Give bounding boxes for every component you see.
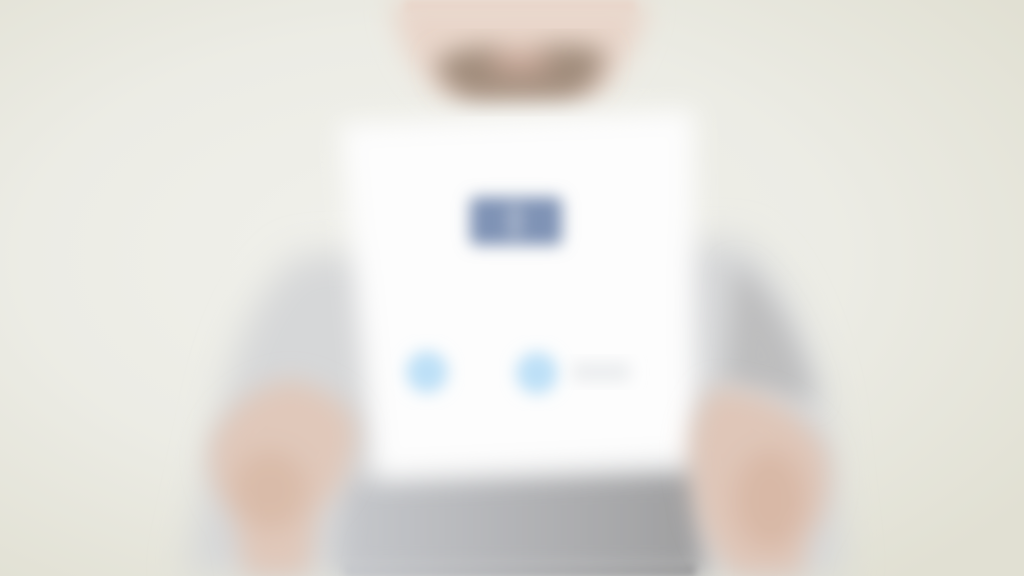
card logo [470,197,562,245]
card caption [572,362,630,382]
card icon: right blue circle [516,352,558,394]
shirt bottom edge [345,564,695,576]
left hand [210,380,356,576]
shirt shadow [335,265,815,576]
card icon: left blue circle [406,351,448,393]
shirt [185,240,845,576]
face [392,0,648,96]
card [340,110,696,478]
right hand [690,388,829,576]
face top edge [405,0,635,12]
beard [435,45,606,100]
